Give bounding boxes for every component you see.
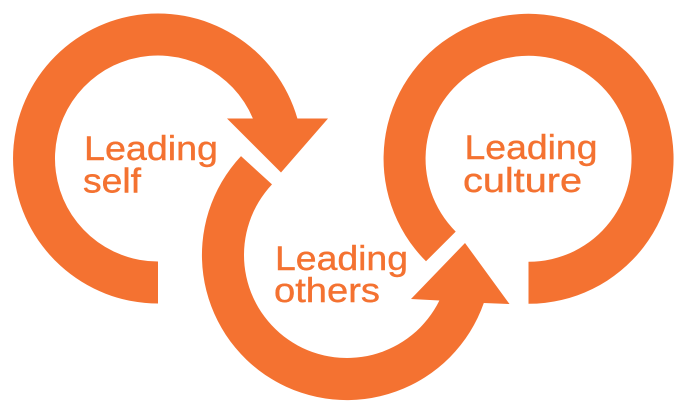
label: leading self: self [83, 162, 142, 200]
label: leading self: Leading [84, 130, 218, 168]
label: leading culture [463, 129, 598, 200]
loop: leading others [202, 156, 510, 400]
loop: leading culture [384, 14, 674, 304]
loop: leading self [13, 13, 328, 303]
ring: culture [384, 14, 674, 304]
arrow ring: self [13, 13, 328, 303]
label: leading culture: Leading [464, 129, 598, 167]
arrow ring: others [202, 156, 510, 400]
label: leading others: Leading [275, 240, 408, 278]
label: leading culture: culture [463, 162, 582, 200]
label: leading others [274, 240, 408, 310]
label: leading others: others [274, 272, 380, 310]
label: leading self [83, 130, 218, 200]
